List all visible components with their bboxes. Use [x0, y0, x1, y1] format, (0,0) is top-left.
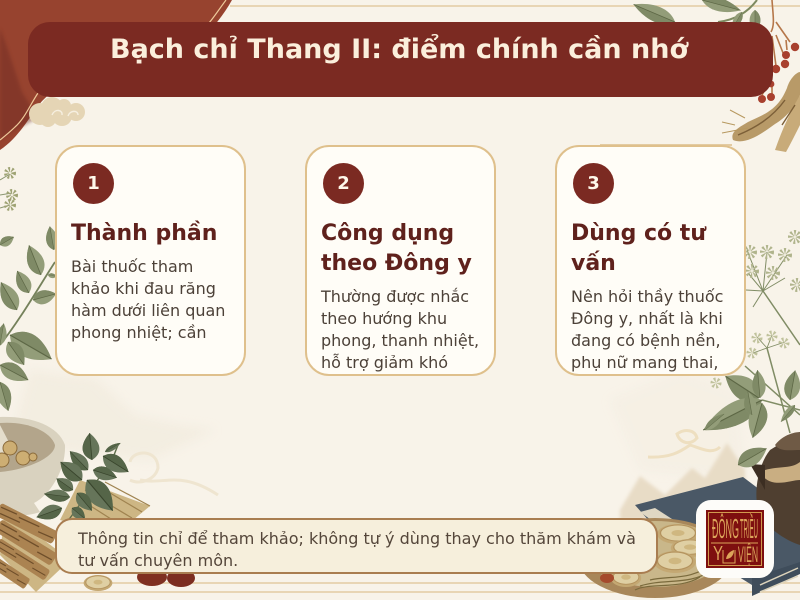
callout: disclaimer: [55, 518, 658, 574]
logo: Đông Triều Y Viện seal: TRIỀU: [740, 513, 758, 545]
panel: card 2 Công dụng theo Đông y: [305, 145, 496, 376]
number badge 2: [323, 163, 364, 204]
text: card 1 body: hàm dưới liên quan: [71, 301, 225, 320]
bamboo mat and leaves: [34, 432, 150, 535]
text: card 2 body: [320, 287, 479, 372]
text: disclaimer: tư vấn chuyên môn.: [78, 551, 238, 570]
right botanical umbels: [698, 233, 800, 440]
number badge 1: [73, 163, 114, 204]
clay pot: [702, 390, 800, 545]
cloud top-left: [29, 97, 85, 127]
text: card 3 body: đang có bệnh nền,: [571, 331, 721, 350]
number badge 3: 3: [587, 173, 600, 194]
title: Bạch chỉ Thang II: điểm chính cần nhớ: [110, 34, 688, 65]
logo: Đông Triều Y Viện seal: [696, 500, 774, 578]
text: card 1 body: Bài thuốc tham: [71, 257, 193, 276]
faint cloud left: [130, 453, 218, 495]
heading: Công dụng theo Đông y: [321, 221, 472, 276]
text: disclaimer: Thông tin chỉ để tham khảo; không tự ý dùng thay cho thăm khám và: [78, 529, 636, 548]
heading: Dùng có tư vấn: [571, 221, 706, 276]
text: card 1 body: khảo khi đau răng: [71, 279, 216, 298]
washes: [15, 370, 745, 480]
root sticks: [0, 503, 70, 592]
panel: card 1 Thành phần: [55, 145, 246, 376]
left mortar: [0, 417, 65, 516]
heading: Công dụng theo Đông y: Công dụng: [321, 221, 454, 246]
heading: Dùng có tư vấn: Dùng có tư: [571, 221, 706, 246]
title banner: [28, 22, 773, 97]
logo: Đông Triều Y Viện seal: ĐÔNG: [712, 514, 739, 545]
basket: [578, 518, 732, 598]
top-right leaves: [631, 0, 760, 34]
text: card 3 body: Đông y, nhất là khi: [571, 309, 723, 328]
text: card 2 body: Thường được nhắc: [321, 287, 469, 306]
top-left red panel: [0, 0, 232, 150]
text: card 2 body: hỗ trợ giảm khó: [321, 353, 448, 372]
heading: Dùng có tư vấn: vấn: [571, 251, 616, 276]
text: card 3 body: phụ nữ mang thai,: [571, 353, 718, 372]
logo: Đông Triều Y Viện seal: Y: [713, 542, 723, 565]
berries and root: [722, 0, 800, 152]
slices and dates: [84, 568, 195, 591]
panel: card 3 Dùng có tư vấn: [555, 145, 746, 376]
text: card 1 body: phong nhiệt; cần: [71, 323, 207, 342]
heading: Công dụng theo Đông y: theo Đông y: [321, 251, 472, 276]
distant mountains: [620, 443, 745, 520]
number badge 2: 2: [337, 173, 350, 194]
text: card 2 body: phong, thanh nhiệt,: [321, 331, 479, 350]
right-bottom cloud: [648, 431, 720, 457]
heading: Thành phần: Thành phần: [71, 221, 217, 246]
text: card 3 body: [571, 287, 723, 372]
logo: Đông Triều Y Viện seal: VIỆN: [738, 542, 758, 567]
book: [635, 477, 800, 596]
text: card 3 body: Nên hỏi thầy thuốc: [571, 287, 723, 306]
text: card 1 body: [71, 257, 225, 342]
number badge 3: [573, 163, 614, 204]
number badge 1: 1: [87, 173, 100, 194]
left botanical branch: [0, 170, 60, 413]
text: disclaimer: [78, 529, 636, 570]
text: card 2 body: theo hướng khu: [321, 309, 447, 328]
